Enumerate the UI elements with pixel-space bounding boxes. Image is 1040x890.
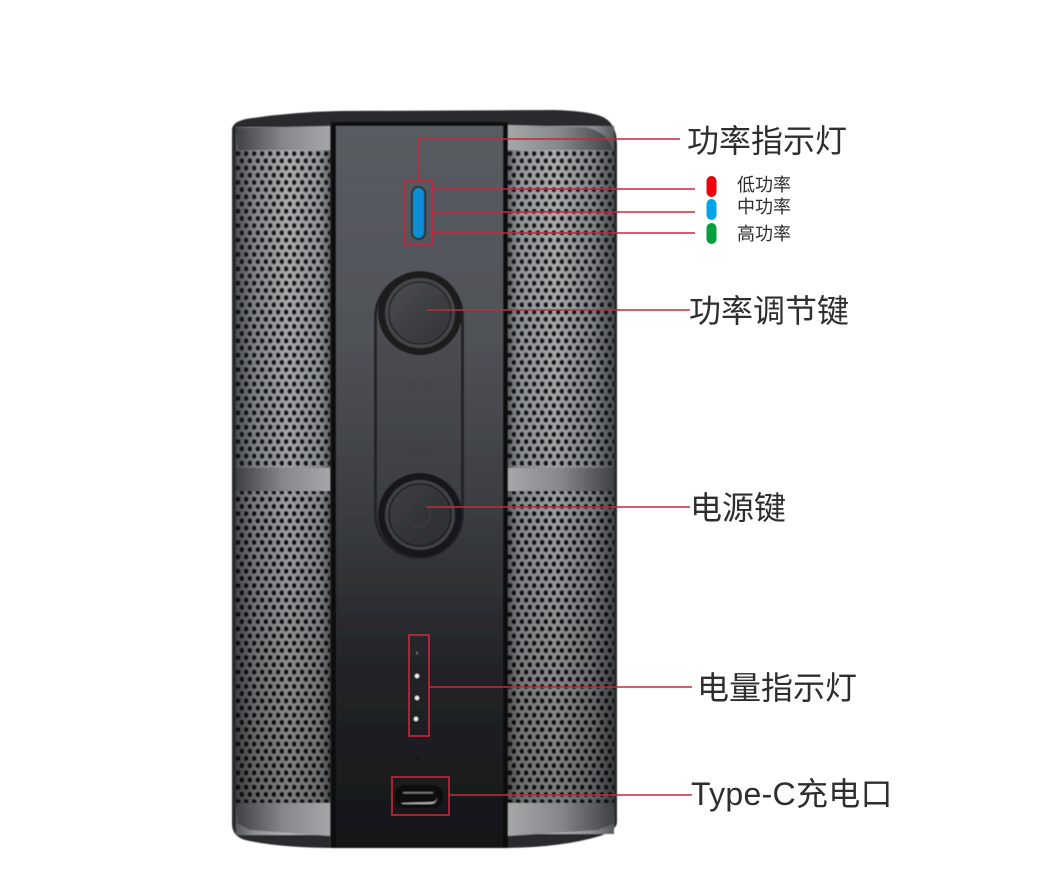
centre panel: [331, 122, 508, 848]
leader: low power: [432, 188, 695, 190]
highlight box: charging port: [392, 777, 449, 815]
device body: [232, 110, 617, 848]
green dot: [706, 223, 716, 244]
label: low power: 低功率: [737, 175, 791, 195]
highlight box: power light: [405, 181, 432, 245]
power button: [378, 473, 462, 557]
Type-C port: [395, 785, 443, 808]
red dot: [706, 176, 716, 197]
label: power adjust key: 功率调节键: [689, 293, 849, 329]
label: power indicator: 功率指示灯: [687, 123, 847, 159]
battery indicator dots: [414, 652, 419, 759]
moulded label: 电源: 电源: [405, 440, 435, 457]
button capsule: [374, 272, 464, 559]
leader: battery lights: [429, 686, 692, 688]
blue dot: [706, 199, 716, 220]
leader: power indicator: [418, 139, 680, 180]
power indicator light: [411, 186, 426, 240]
label: power key: 电源键: [690, 490, 786, 526]
power legend: [706, 175, 791, 244]
speaker device: [232, 110, 617, 848]
label: high power: 高功率: [737, 224, 791, 244]
label: medium power: 中功率: [737, 197, 791, 217]
label: battery indicator: 电量指示灯: [697, 670, 857, 706]
moulded label: 功率: 功率: [405, 379, 435, 396]
leader: medium power: [432, 211, 695, 213]
label: Type-C charging port: Type-C充电口: [691, 776, 893, 812]
highlight box: battery lights: [409, 635, 429, 736]
power adjust button: [378, 271, 462, 355]
leader: high power: [432, 232, 695, 234]
leader: power adjust key: [427, 309, 690, 311]
leader: charging port: [449, 794, 692, 796]
right grill: [508, 125, 614, 836]
callout lines: [392, 139, 695, 815]
left grill: [236, 126, 330, 836]
leader: power key: [427, 506, 690, 508]
